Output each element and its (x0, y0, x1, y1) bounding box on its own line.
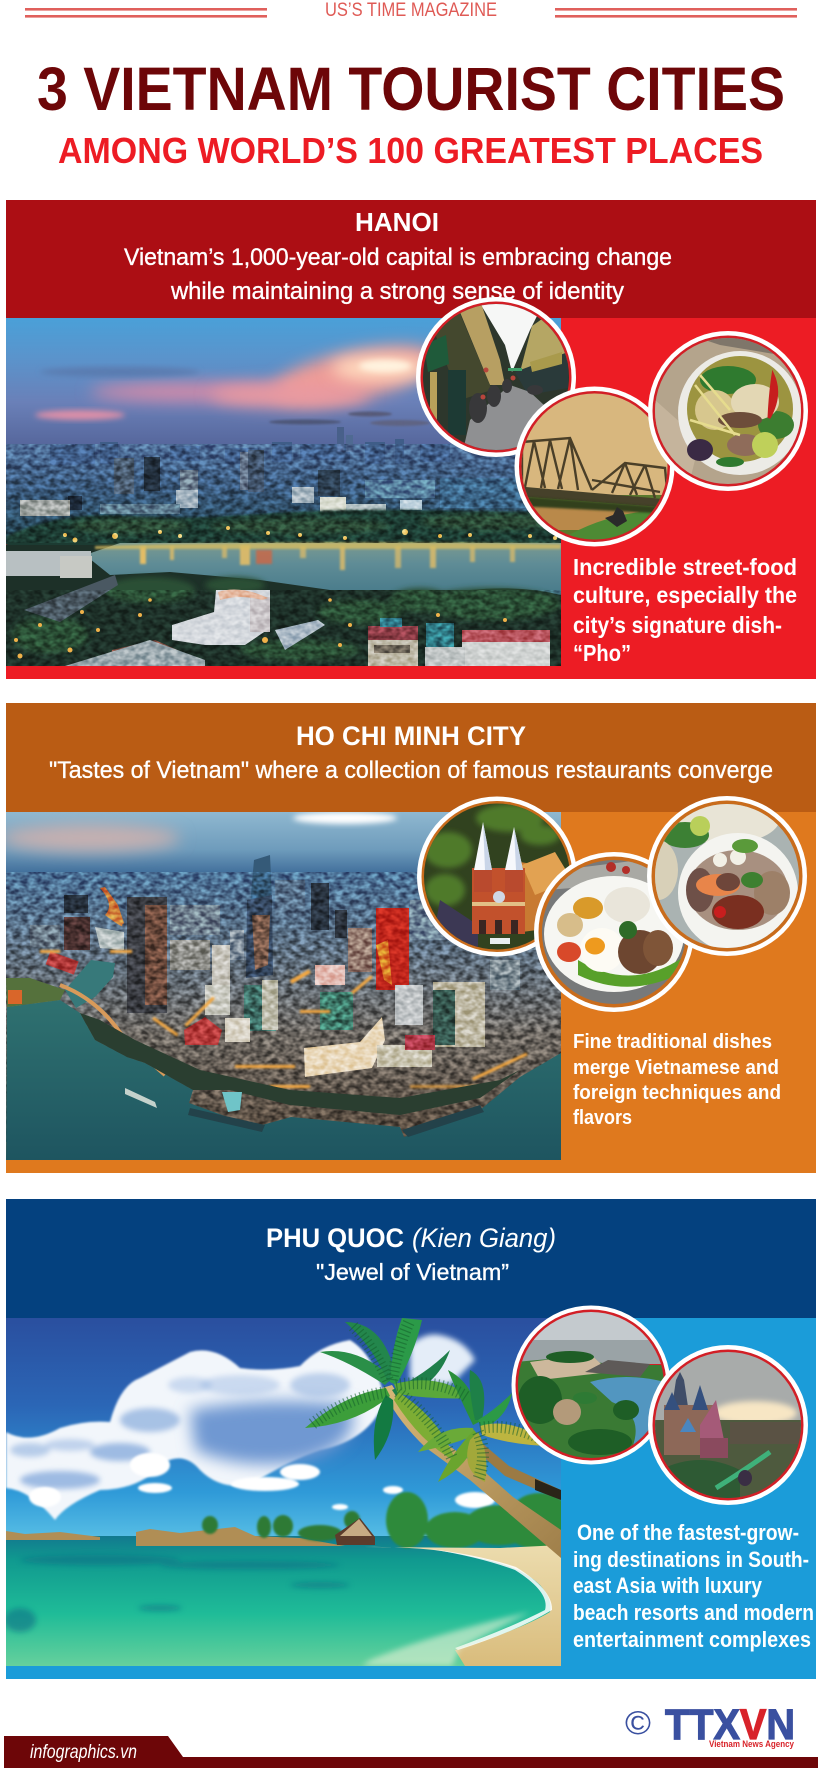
Hanoi panel background (6, 318, 816, 679)
subtitle: AMONG WORLD’S 100 GREATEST PLACES (58, 130, 763, 171)
HCMC highlight text: foreign techniques and (573, 1081, 781, 1104)
Phu Quoc heading: PHU QUOC (266, 1223, 404, 1253)
logo: TTXVN Vietnam News Agency: Vietnam News Agency (709, 1739, 794, 1749)
HCMC heading: HO CHI MINH CITY (296, 721, 526, 751)
Phu Quoc highlight text (573, 1520, 814, 1652)
Phu Quoc description: "Jewel of Vietnam” (316, 1259, 509, 1285)
top label: US’S TIME MAGAZINE (325, 0, 497, 21)
panel: Hanoi (6, 200, 816, 679)
Phu Quoc heading: (Kien Giang) (412, 1223, 556, 1253)
Hanoi description (124, 244, 672, 305)
Phu Quoc highlight text: east Asia with luxury (573, 1573, 763, 1598)
copyright mark: © (625, 1704, 651, 1741)
photo circle: castle water park (648, 1345, 810, 1505)
Hanoi highlight text: city’s signature dish- (573, 612, 782, 638)
photo circle: broken rice plate (534, 852, 694, 1012)
HCMC highlight text (573, 1030, 781, 1129)
panel: Ho Chi Minh City (0, 703, 816, 1173)
HCMC description: "Tastes of Vietnam" where a collection of famous restaurants converge (49, 757, 773, 784)
photo circle: Notre Dame cathedral (417, 796, 577, 956)
footer site name: infographics.vn (30, 1742, 137, 1763)
Hanoi description: while maintaining a strong sense of identity (170, 278, 625, 305)
HCMC highlight text: flavors (573, 1106, 632, 1129)
photo circle: beach resort (512, 1306, 670, 1464)
Phu Quoc header band (6, 1199, 816, 1318)
logo: TTXVN Vietnam News Agency: TTXVN (665, 1701, 795, 1749)
Hanoi highlight text (573, 554, 797, 666)
photo: Ho Chi Minh City aerial (0, 812, 561, 1160)
top rule: right (555, 8, 797, 18)
Hanoi description: Vietnam’s 1,000-year-old capital is embracing change (124, 244, 672, 271)
Phu Quoc highlight text: One of the fastest-grow- (577, 1520, 799, 1545)
top rule: left (25, 8, 267, 18)
Hanoi highlight text: Incredible street-food (573, 554, 797, 580)
photo circle: pho bowl (648, 331, 810, 491)
photo: Phu Quoc beach (4, 1318, 570, 1666)
HCMC highlight text: merge Vietnamese and (573, 1056, 779, 1079)
Phu Quoc panel background (6, 1318, 816, 1679)
Hanoi header band (6, 200, 816, 318)
photo circle: Hanoi old street (416, 297, 576, 457)
HCMC header band (6, 703, 816, 812)
HCMC panel background (6, 812, 816, 1173)
Hanoi heading: HANOI (355, 207, 439, 237)
panel: Phu Quoc (4, 1199, 816, 1679)
photo circle: hu tieu bowl (638, 792, 807, 956)
Hanoi highlight text: culture, especially the (573, 582, 797, 608)
footer bar (4, 1736, 818, 1768)
HCMC highlight text: Fine traditional dishes (573, 1030, 772, 1053)
Phu Quoc heading (266, 1223, 556, 1253)
photo circle: Long Bien bridge (514, 385, 675, 555)
photo: Hanoi skyline at dusk (6, 318, 561, 666)
Hanoi highlight text: “Pho” (573, 640, 631, 666)
